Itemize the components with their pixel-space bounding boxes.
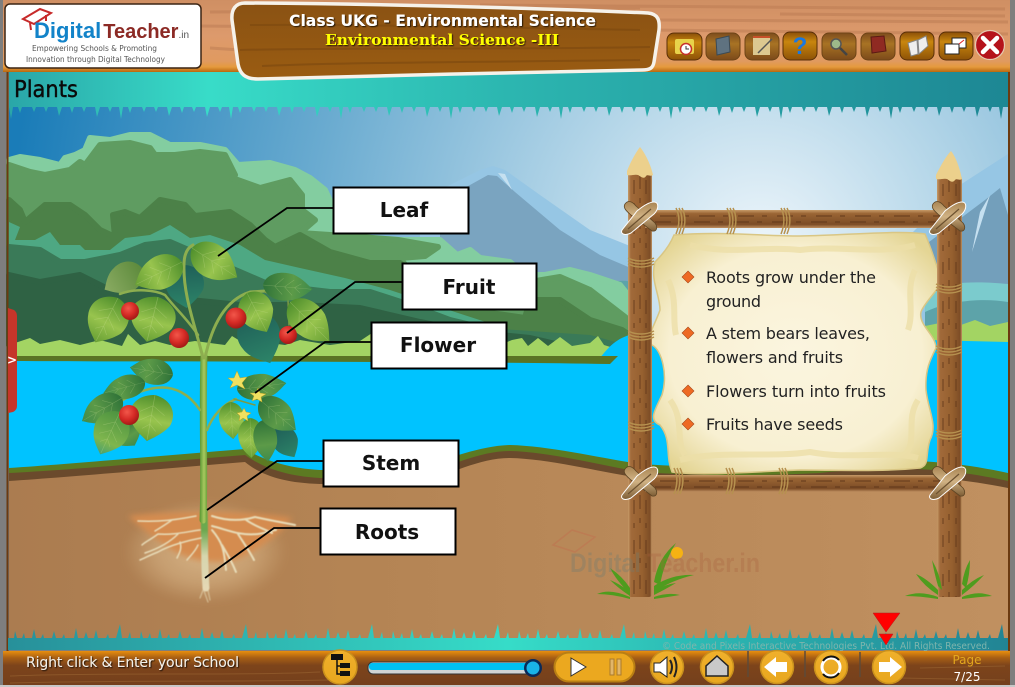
button: back — [760, 650, 794, 684]
river — [9, 333, 1008, 490]
label: fruit: Fruit — [443, 275, 496, 299]
root lines — [138, 510, 295, 602]
icon: timer folder — [667, 33, 702, 60]
button: next — [872, 650, 906, 684]
bottom teal strip — [8, 624, 1008, 652]
bullet: roots — [682, 268, 876, 311]
logo tagline line two: Innovation through Digital Technology — [26, 55, 165, 64]
icon: reference book — [706, 33, 740, 60]
right post — [936, 151, 962, 597]
label: flower: Flower — [400, 333, 476, 357]
bullet: roots: ground — [706, 292, 761, 311]
logo tagline line one: Empowering Schools & Promoting — [32, 44, 157, 53]
label: stem — [207, 440, 458, 510]
watermark: Digital Teacher.in — [570, 548, 760, 578]
bullet: fruits: Fruits have seeds — [706, 415, 843, 434]
label: stem: Stem — [362, 451, 420, 475]
icon: magnifier — [822, 33, 856, 60]
far bank grass — [9, 333, 620, 357]
title line two: Environmental Science -III — [325, 31, 559, 49]
small flower — [671, 547, 683, 559]
icon: open book — [900, 32, 934, 60]
parchment stains — [668, 245, 918, 460]
parchment — [650, 232, 941, 474]
sign board — [597, 147, 992, 599]
scene background — [9, 104, 1008, 650]
tomato plant — [75, 234, 342, 520]
icon: close — [976, 30, 1004, 60]
label: leaf — [218, 188, 468, 256]
label: leaf: Leaf — [380, 198, 429, 222]
label: fruit — [287, 264, 536, 333]
rope bindings — [628, 208, 962, 494]
top rail — [645, 210, 945, 228]
bullet: flowers: Flowers turn into fruits — [706, 382, 886, 401]
icon: resize window — [939, 32, 973, 60]
play pause pill — [554, 652, 634, 682]
page label: Page — [952, 653, 982, 667]
progress bar — [368, 659, 542, 677]
top teal band — [9, 72, 1008, 120]
button: sound — [650, 650, 684, 684]
stem and branches — [115, 245, 289, 520]
side tab: > — [7, 353, 17, 367]
flowers — [228, 371, 266, 421]
icon: dictionary — [861, 33, 895, 60]
soil halo — [123, 500, 287, 604]
toolbar icons — [667, 30, 1004, 60]
orange soil — [128, 512, 292, 562]
title plaque — [232, 3, 659, 79]
icon: notepad — [745, 33, 779, 60]
roots — [123, 500, 295, 604]
school prompt: Right click & Enter your School — [26, 655, 239, 671]
title line one: Class UKG - Environmental Science — [289, 11, 596, 30]
bullet list — [682, 268, 886, 434]
distant teal hills — [607, 281, 1008, 345]
page heading: Plants — [14, 77, 78, 103]
bullet: stem: A stem bears leaves, — [706, 324, 870, 343]
right grass tuft — [905, 560, 992, 599]
mountain: right — [905, 154, 1008, 345]
river bank strip — [9, 445, 1008, 500]
bullet: stem: flowers and fruits — [706, 348, 843, 367]
bottom wooden control bar — [0, 650, 1015, 687]
forest: mint back layer — [9, 135, 640, 345]
logo panel — [5, 4, 201, 68]
mountain: centre — [420, 166, 640, 345]
page count: 7/25 — [954, 670, 980, 684]
corner lashings — [622, 202, 966, 499]
left post — [627, 147, 653, 597]
top wooden header bar — [3, 0, 1010, 72]
logo hat icon — [23, 9, 51, 30]
forest: deep green front layer — [9, 242, 615, 345]
back leaves — [97, 255, 306, 464]
copyright: © Code and Pixels Interactive Technologies Pvt. Ltd. All Rights Reserved. — [662, 641, 990, 652]
bullet: stem — [682, 324, 870, 367]
button: reload — [814, 650, 848, 684]
label: flower — [255, 322, 506, 393]
forest: dark green layer — [9, 200, 640, 345]
tomatoes — [119, 302, 297, 425]
sky — [9, 104, 1008, 354]
logo wordmark: DigitalTeacher.in — [34, 18, 189, 43]
label: roots: Roots — [355, 520, 419, 544]
red pointer arrows — [873, 613, 900, 645]
bullet: roots: Roots grow under the — [706, 268, 876, 287]
label: roots — [205, 508, 456, 578]
bottom rail — [645, 475, 945, 492]
icon: help — [783, 32, 817, 60]
button: home — [700, 650, 734, 684]
left grass tuft — [597, 543, 694, 599]
icon: help: ? — [793, 33, 807, 60]
front leaves — [75, 234, 342, 463]
side tab — [7, 308, 17, 413]
forest: mid green crown — [9, 143, 640, 345]
ground — [9, 458, 1008, 650]
forest: teal jagged layer — [9, 222, 540, 345]
watermark — [553, 530, 760, 578]
button: outline — [323, 650, 357, 684]
